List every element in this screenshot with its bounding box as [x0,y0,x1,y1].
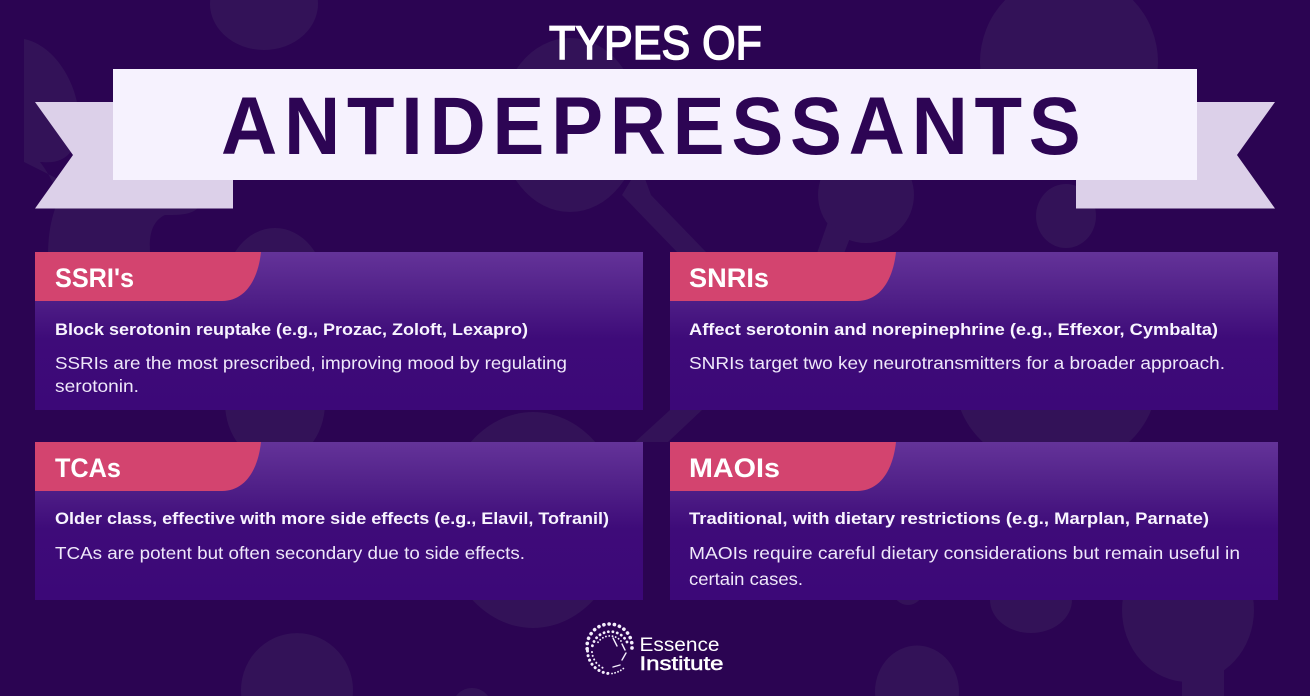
heading: types of: TYPES OF [549,16,762,69]
heading: MAOIs: MAOIs [689,453,780,483]
panel: MAOIs [670,442,1278,600]
description: SNRIs: SNRIs target two key neurotransmitters for a broader approach. [689,353,1225,373]
description: MAOIs: certain cases. [689,569,803,589]
panel: SSRIs [35,252,643,410]
heading: SSRIs: SSRI's [55,263,134,293]
description: MAOIs [689,543,1240,589]
subheading: MAOIs: Traditional, with dietary restrictions (e.g., Marplan, Parnate) [689,509,1209,528]
ribbon tail: left [35,102,233,208]
subheading: SSRIs: Block serotonin reuptake (e.g., Prozac, Zoloft, Lexapro) [55,320,528,339]
heading: SNRIs: SNRIs [689,263,769,293]
banner [113,69,1197,180]
heading: TCAs: TCAs [55,453,121,483]
ribbon tail: right [1076,102,1275,208]
panel: SNRIs [670,252,1278,410]
tab: SSRIs [35,252,261,301]
description: SSRIs: SSRIs are the most prescribed, improving mood by regulating [55,353,567,373]
description: TCAs: TCAs are potent but often secondary due to side effects. [55,543,525,563]
heading: antidepressants: ANTIDEPRESSANTS [221,80,1081,171]
subheading: TCAs: Older class, effective with more side effects (e.g., Elavil, Tofranil) [55,509,609,528]
wordmark: Essence: Essence [640,634,720,656]
tab: TCAs [35,442,261,491]
tab: SNRIs [670,252,896,301]
description: MAOIs: MAOIs require careful dietary considerations but remain useful in [689,543,1240,563]
description: SSRIs: serotonin. [55,376,139,396]
title ribbon [35,69,1275,208]
panel: TCAs [35,442,643,600]
tab: MAOIs [670,442,896,491]
icon: dotted spiral [587,624,632,674]
description: SSRIs [55,353,567,396]
subheading: SNRIs: Affect serotonin and norepinephrine (e.g., Effexor, Cymbalta) [689,320,1218,339]
logo: Essence Institute [587,624,724,675]
wordmark: Institute: Institute [640,653,724,675]
